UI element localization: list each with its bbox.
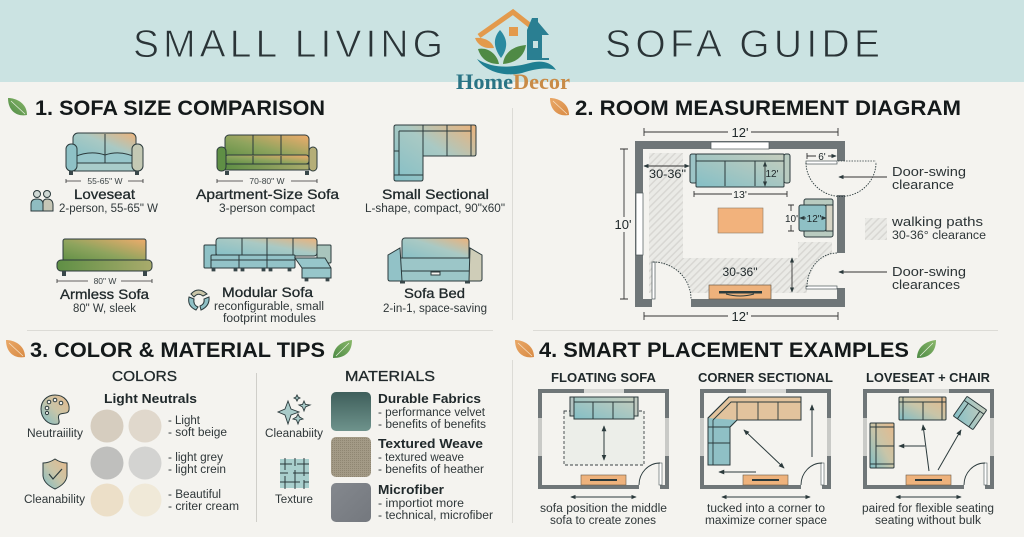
materials column: MATERIALS	[345, 368, 435, 385]
colour notes: - Beautiful	[168, 489, 221, 501]
dimension labels: 30-36"	[649, 167, 686, 181]
logo: HomeDecor: HomeDecor	[456, 69, 570, 94]
example: floating sofa: sofa position the middle	[540, 503, 667, 515]
title: SMALL LIVING	[133, 23, 443, 66]
icon: palette	[41, 395, 69, 424]
plan sofa	[690, 154, 790, 187]
example: floating sofa: FLOATING SOFA	[551, 371, 656, 385]
materials column: Texture	[275, 494, 313, 506]
modular sofa: footprint modules	[223, 313, 316, 325]
room walls and doors	[635, 141, 876, 307]
example: floating sofa	[538, 371, 669, 527]
dimension labels: 30-36"	[723, 265, 757, 279]
sofa bed	[383, 238, 487, 315]
modular sofa: Modular Sofa	[222, 284, 313, 300]
colour notes: - light crein	[168, 464, 226, 476]
icon: green leaf	[333, 340, 352, 358]
colour notes: - criter cream	[168, 501, 239, 513]
colors column	[24, 368, 239, 516]
colour notes	[168, 415, 239, 513]
plan armchair	[799, 199, 833, 237]
sofa bed: Sofa Bed	[404, 285, 465, 301]
apartment-size sofa: Apartment-Size Sofa	[196, 186, 339, 202]
modular sofa: reconfigurable, small	[214, 301, 324, 313]
loveseat: Loveseat	[74, 186, 135, 202]
small sectional	[365, 125, 505, 215]
callout: door-swing clearances: clearances	[892, 277, 961, 292]
microfiber text: - technical, microfiber	[378, 510, 493, 522]
swatch: microfiber	[331, 483, 371, 522]
colour swatches	[90, 410, 162, 516]
small sectional: L-shape, compact, 90"x60"	[365, 203, 505, 215]
example: corner sectional: tucked into a corner to	[707, 503, 825, 515]
textured weave text: - textured weave	[378, 452, 464, 464]
icon: two people	[31, 190, 53, 211]
plan console	[709, 285, 771, 299]
icon: sparkles	[278, 395, 310, 424]
dimension labels: 12'	[765, 169, 779, 180]
legend: walking paths: walking paths	[891, 214, 984, 229]
heading: sofa size comparison: 1. SOFA SIZE COMPARISON	[35, 97, 325, 120]
example: corner sectional	[698, 371, 833, 527]
modular sofa	[204, 238, 331, 325]
apartment-size sofa	[196, 135, 339, 215]
panel: room measurement diagram	[550, 97, 986, 324]
armless sofa: Armless Sofa	[60, 286, 149, 302]
example: floating sofa: sofa to create zones	[550, 515, 656, 527]
dimension labels: 13'	[733, 189, 747, 201]
loveseat	[59, 133, 158, 215]
dimension labels: 10'	[785, 214, 798, 225]
logo: HomeDecor	[456, 12, 570, 94]
textured weave text	[378, 436, 484, 476]
legend: walking paths	[865, 214, 986, 242]
icon: orange leaf	[550, 98, 569, 115]
durable fabrics text	[378, 391, 486, 431]
materials column	[265, 368, 493, 522]
sofa bed: 2-in-1, space-saving	[383, 303, 487, 315]
example: loveseat and chair: paired for flexible seating	[862, 503, 994, 515]
heading: room measurement diagram: 2. ROOM MEASUREMENT DIAGRAM	[575, 97, 961, 120]
materials column: Cleanabiity	[265, 428, 323, 440]
colors column: Cleanability	[24, 494, 85, 506]
colors column: Light Neutrals	[104, 391, 197, 406]
apartment-size sofa: 3-person compact	[219, 203, 316, 215]
durable fabrics text: - benefits of benefits	[378, 419, 486, 431]
icon: green leaf	[917, 340, 936, 358]
textured weave text: - benefits of heather	[378, 464, 484, 476]
small sectional: Small Sectional	[382, 186, 489, 202]
callout: door-swing clearance	[892, 164, 966, 192]
colour notes: - soft beige	[168, 427, 227, 439]
column separator	[256, 373, 258, 522]
panel: color and material tips	[6, 339, 493, 522]
dimension labels: 12'	[732, 309, 748, 324]
legend: walking paths: 30-36° clearance	[892, 230, 986, 242]
heading: color and material tips: 3. COLOR & MATERIAL TIPS	[30, 339, 325, 362]
swatch: weave	[331, 437, 371, 477]
example: corner sectional: CORNER SECTIONAL	[698, 371, 833, 385]
colour notes: - light grey	[168, 452, 223, 464]
armless sofa: 80" W, sleek	[73, 303, 136, 315]
icon: orange leaf	[515, 340, 534, 357]
callout: door-swing clearances: Door-swing	[892, 264, 966, 279]
icon: weave texture	[280, 458, 309, 489]
callout: door-swing clearance: clearance	[892, 177, 954, 192]
icon: shield check	[43, 459, 67, 489]
callout: door-swing clearance: Door-swing	[892, 164, 966, 179]
colors column: COLORS	[112, 368, 177, 385]
icon: green leaf	[8, 98, 27, 115]
dimension labels: 6'	[818, 152, 826, 163]
dimension labels	[615, 125, 826, 324]
armless sofa: 80" W	[94, 276, 116, 286]
callout: door-swing clearances	[892, 264, 966, 292]
panel: sofa size comparison	[8, 97, 505, 325]
durable fabrics text: Durable Fabrics	[378, 391, 481, 406]
plan coffee table	[718, 208, 763, 233]
example: loveseat and chair: LOVESEAT + CHAIR	[866, 371, 990, 385]
colour notes: - Light	[168, 415, 201, 427]
microfiber text: - importiot more	[378, 498, 464, 510]
durable fabrics text: - performance velvet	[378, 407, 486, 419]
header band	[0, 0, 1024, 82]
icon: orange leaf	[6, 340, 25, 357]
armless sofa	[57, 239, 152, 315]
example: loveseat and chair	[862, 371, 994, 527]
microfiber text: Microfiber	[378, 482, 444, 497]
walking path hatch	[649, 153, 832, 293]
dimension labels: 12"	[807, 214, 822, 225]
swatch: velvet	[331, 392, 371, 431]
loveseat: 55-65" W	[87, 176, 123, 186]
dimension labels: 12'	[732, 125, 748, 140]
dimension labels: 10'	[615, 217, 631, 232]
title: SOFA GUIDE	[605, 23, 880, 66]
example: corner sectional: maximize corner space	[705, 515, 827, 527]
room dimensions	[620, 128, 887, 320]
textured weave text: Textured Weave	[378, 436, 483, 451]
apartment-size sofa: 70-80" W	[249, 176, 285, 186]
heading: smart placement examples: 4. SMART PLACEMENT EXAMPLES	[539, 339, 909, 362]
panel: smart placement examples	[515, 339, 994, 527]
microfiber text	[378, 482, 493, 522]
icon: recycle modules	[189, 290, 209, 310]
example: loveseat and chair: seating without bulk	[875, 515, 981, 527]
dividers	[27, 108, 998, 523]
colors column: Neutraiility	[27, 428, 83, 440]
title	[133, 23, 880, 66]
loveseat: 2-person, 55-65" W	[59, 203, 158, 215]
